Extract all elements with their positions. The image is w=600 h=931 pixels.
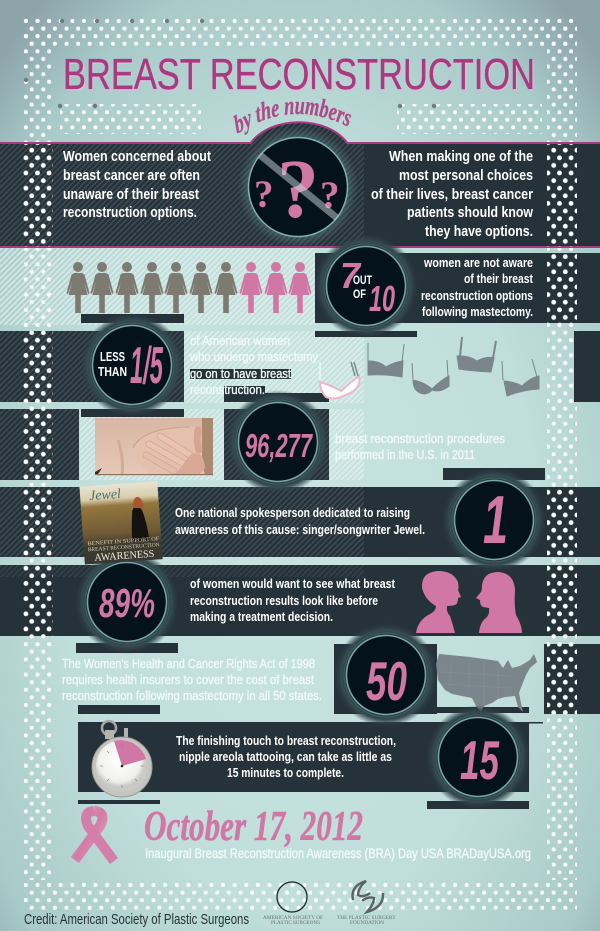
logo: American Society of Plastic Surgeons: AMERICAN SOCIETY OF <box>263 915 323 921</box>
badge: 89% <box>75 550 179 654</box>
grey accent dots <box>24 19 436 108</box>
intro text right: of their lives, breast cancer <box>371 186 533 203</box>
badge: question marks: ? <box>254 173 274 216</box>
badge: question marks <box>238 127 358 247</box>
badge: 50: 50 <box>366 650 407 712</box>
album cover: Jewel <box>79 481 163 565</box>
logo: Plastic Surgery Foundation: FOUNDATION <box>350 920 384 926</box>
text: 1/5 <box>189 333 318 397</box>
icon: silhouettes <box>416 571 522 633</box>
text: Women's Health and Cancer Rights Act: The Women's Health and Cancer Rights Act of 1998 <box>62 656 315 671</box>
text: tattooing: The finishing touch to breast reconstruction, <box>176 733 396 748</box>
magenta rules <box>0 122 600 248</box>
text: 96,277: breast reconstruction procedures <box>335 431 505 446</box>
text: 96,277: performed in the U.S. in 2011 <box>335 447 475 462</box>
dark bands <box>0 122 600 809</box>
badge: 96,277: 96,277 <box>245 427 313 464</box>
badge: less than 1/5: THAN <box>98 364 127 379</box>
photo: hand <box>95 418 213 475</box>
text: BRA Day: Inaugural Breast Reconstruction Awareness (BRA) Day USA BRADayUSA.org <box>145 846 531 861</box>
intro text right: most personal choices <box>399 167 533 184</box>
icon: US map <box>436 654 537 712</box>
subtitle: by the numbers: by the numbers <box>233 98 352 135</box>
text: 89%: of women would want to see what breast <box>190 576 396 591</box>
icon: pink ribbon <box>75 811 114 861</box>
dots over dark bands <box>23 144 577 714</box>
badge: 7 out of 10 <box>314 234 418 338</box>
text: 1/5: reconstruction. <box>190 382 265 397</box>
text: Women's Health and Cancer Rights Act: requires health insurers to cover the cost of breast <box>62 672 314 687</box>
icons: bras <box>320 337 539 398</box>
women pictogram: 7 of 10 <box>66 262 312 313</box>
logo: American Society of Plastic Surgeons: PLASTIC SURGEONS <box>271 920 320 926</box>
badge: 7 out of 10: OUT <box>353 273 372 287</box>
dark hatching <box>0 122 364 577</box>
badge: 15 <box>426 705 530 809</box>
badge: question marks: ? <box>277 143 319 236</box>
intro text right <box>371 148 533 240</box>
album cover: Jewel: AWARENESS <box>94 549 155 564</box>
badge: 7 out of 10: 10 <box>369 278 395 319</box>
text: 7 out of 10: following mastectomy. <box>422 304 533 319</box>
text: Women's Health and Cancer Rights Act: reconstruction following mastectomy in all 50 states. <box>62 688 322 703</box>
light hatched panels <box>0 248 364 480</box>
text: 7 out of 10: of their breast <box>464 271 534 286</box>
text: 96,277 <box>335 431 505 462</box>
badge: 7 out of 10: OF <box>353 287 366 301</box>
date: October 17, 2012 <box>144 804 363 850</box>
text: 1/5: of American women <box>190 333 290 348</box>
text: tattooing: nipple areola tattooing, can take as little as <box>179 749 392 764</box>
logo: Plastic Surgery Foundation <box>337 881 396 926</box>
album cover: Jewel: BREAST RECONSTRUCTION <box>88 542 160 553</box>
text: 7 out of 10: women are not aware <box>423 255 533 270</box>
text: spokesperson: One national spokesperson dedicated to raising <box>175 505 410 520</box>
text: 1/5: go on to have breast <box>190 366 291 381</box>
text: spokesperson: awareness of this cause: singer/songwriter Jewel. <box>175 522 425 537</box>
intro text left: unaware of their breast <box>63 186 199 203</box>
badge: less than 1/5: 1/5 <box>130 337 163 395</box>
badge: 1 <box>442 468 546 572</box>
badge: 96,277 <box>226 390 330 494</box>
credit: Credit: American Society of Plastic Surgeons <box>24 912 249 928</box>
badge: 89%: 89% <box>99 580 155 626</box>
intro text right: they have options. <box>425 223 533 240</box>
badge: 7 out of 10: 7 <box>340 255 362 296</box>
text: 89%: reconstruction results look like before <box>190 593 378 608</box>
text: tattooing: 15 minutes to complete. <box>227 765 344 780</box>
badge: less than 1/5: LESS <box>100 349 125 364</box>
text: 89%: making a treatment decision. <box>190 609 333 624</box>
logo: American Society of Plastic Surgeons <box>263 882 323 926</box>
intro text left: reconstruction options. <box>63 204 197 221</box>
album cover: Jewel: Jewel <box>89 487 122 504</box>
text: 89% <box>190 576 396 624</box>
text: 7 out of 10 <box>421 255 534 319</box>
badge: 15: 15 <box>460 729 500 791</box>
intro text left <box>63 148 211 221</box>
text: 1/5: who undergo mastectomy <box>189 349 318 364</box>
badge: 50 <box>334 623 438 727</box>
text: tattooing <box>176 733 396 780</box>
intro text right: patients should know <box>407 204 533 221</box>
text: 7 out of 10: reconstruction options <box>421 288 533 303</box>
badge: question marks: ? <box>320 174 340 217</box>
intro text left: breast cancer are often <box>63 167 200 184</box>
icon: stopwatch <box>92 721 152 797</box>
logo: Plastic Surgery Foundation: THE PLASTIC SURGERY <box>337 915 396 921</box>
badge: less than 1/5 <box>80 313 184 417</box>
intro text right: When making one of the <box>389 148 533 165</box>
album cover: Jewel: BENEFIT IN SUPPORT OF <box>87 536 160 547</box>
intro text left: Women concerned about <box>63 148 211 165</box>
badge: 1: 1 <box>483 482 508 558</box>
text: spokesperson <box>175 505 425 537</box>
text: Women's Health and Cancer Rights Act <box>62 656 322 703</box>
